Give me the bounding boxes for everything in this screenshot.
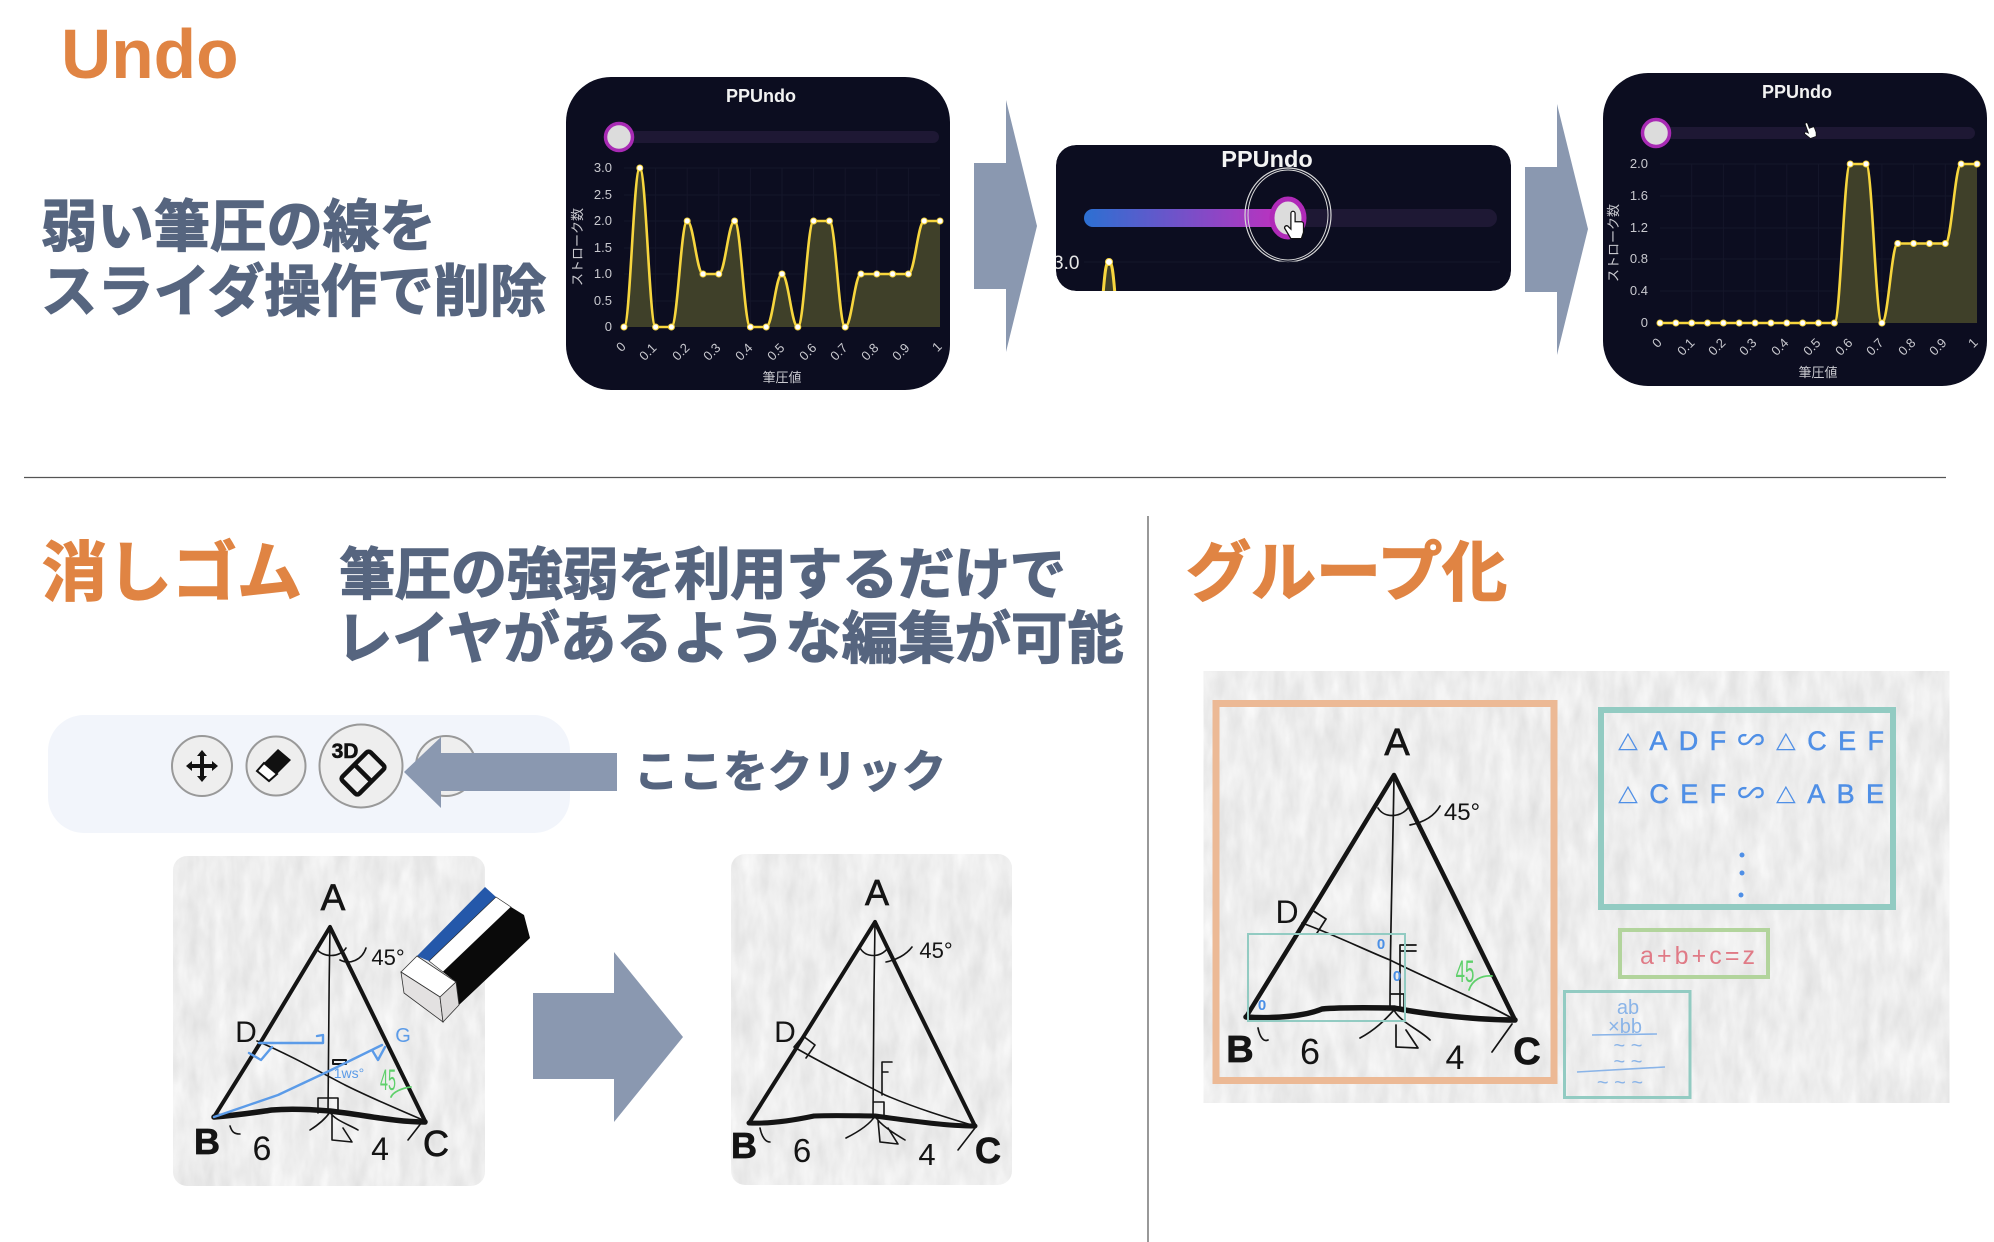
x axis labels: 0 bbox=[613, 339, 629, 355]
arrow: before to after bbox=[533, 952, 683, 1122]
group box: equation bbox=[1620, 930, 1768, 977]
y axis labels: 0.5 bbox=[594, 293, 612, 308]
icon: move button bbox=[172, 736, 232, 796]
icon: 3D eraser button bbox=[320, 724, 402, 808]
axis titles: 筆圧値 bbox=[1798, 365, 1838, 380]
triangle drawing: D bbox=[235, 1016, 257, 1049]
group box: similarity notes: △ CEF∽ △ ABE bbox=[1618, 779, 1884, 809]
triangle drawing: 6 bbox=[253, 1130, 271, 1168]
triangle drawing bbox=[731, 872, 1001, 1172]
group box: similarity notes: △ ADF∽ △ CEF bbox=[1618, 726, 1884, 756]
axis titles: ストローク数 bbox=[570, 208, 585, 286]
y axis labels: 1.2 bbox=[1630, 220, 1648, 235]
axis titles: 筆圧値 bbox=[762, 370, 802, 385]
y axis labels: 2.0 bbox=[1630, 156, 1648, 171]
x axis labels: 1 bbox=[929, 339, 945, 355]
icon: eraser button bbox=[246, 736, 306, 796]
y axis labels: 2.0 bbox=[594, 213, 612, 228]
panel: chart before undo bbox=[566, 77, 950, 390]
group box: multiplication: ×bb bbox=[1608, 1016, 1642, 1038]
x axis labels: 0.2 bbox=[1705, 335, 1729, 359]
arrow: second step bbox=[1525, 104, 1588, 355]
slider: at zero bbox=[606, 124, 939, 150]
text block: undo description: 弱い筆圧の線を bbox=[41, 195, 436, 258]
triangle drawing: 0 bbox=[1393, 968, 1401, 985]
triangle drawing: A bbox=[1384, 722, 1410, 764]
panel: chart before undo: PPUndo bbox=[726, 86, 796, 106]
panel: grouped sketch bbox=[1204, 671, 1950, 1103]
x axis labels: 0.7 bbox=[827, 340, 851, 364]
axis titles bbox=[1606, 204, 1838, 380]
slider: returned to zero bbox=[1642, 120, 1975, 146]
x axis labels: 0.9 bbox=[889, 340, 913, 364]
y axis labels: 0 bbox=[605, 319, 612, 334]
triangle drawing bbox=[194, 877, 449, 1168]
x axis labels: 0.8 bbox=[858, 340, 882, 364]
x axis labels: 0.2 bbox=[669, 340, 693, 364]
heading: grouping: グループ化 bbox=[1186, 536, 1507, 609]
x axis labels: 0.4 bbox=[732, 340, 756, 364]
panel: slider being dragged bbox=[1053, 145, 1511, 295]
x axis labels: 1 bbox=[1965, 335, 1981, 351]
axis titles bbox=[570, 208, 802, 385]
x axis labels: 0.5 bbox=[1800, 335, 1824, 359]
triangle drawing: 45° bbox=[919, 938, 953, 963]
callout: click here: ここをクリック bbox=[634, 748, 946, 797]
x axis labels bbox=[1649, 335, 1981, 359]
y axis labels: 1.5 bbox=[594, 240, 612, 255]
text block: eraser description bbox=[336, 543, 1124, 670]
x axis labels: 0.9 bbox=[1926, 335, 1950, 359]
icon: eraser bbox=[401, 887, 530, 1022]
triangle drawing: 45° bbox=[1444, 799, 1480, 826]
x axis labels: 0.8 bbox=[1895, 335, 1919, 359]
arrow: pointing at the button bbox=[404, 737, 617, 808]
text block: undo description: スライダ操作で削除 bbox=[41, 260, 546, 323]
icon: fourth button bbox=[416, 736, 476, 796]
triangle drawing: 4 bbox=[918, 1137, 936, 1172]
area chart: stroke counts with all pressures bbox=[621, 165, 943, 330]
group box: similarity notes bbox=[1601, 710, 1893, 907]
group box: multiplication: ~ ~ bbox=[1614, 1051, 1642, 1073]
triangle drawing: 6 bbox=[793, 1132, 811, 1169]
icon: 3D eraser button: 3D bbox=[332, 740, 358, 763]
x axis labels: 0.3 bbox=[700, 340, 724, 364]
slider thumb with halo bbox=[1245, 168, 1331, 262]
group box: equation: a+b+c=z bbox=[1640, 942, 1755, 970]
triangle drawing: B bbox=[731, 1125, 757, 1166]
triangle drawing: C bbox=[975, 1130, 1001, 1171]
panel: toolbar bbox=[48, 715, 570, 833]
x axis labels: 0.5 bbox=[764, 340, 788, 364]
panel: chart after undo: PPUndo bbox=[1762, 82, 1832, 102]
y axis labels bbox=[594, 160, 612, 334]
x axis labels: 0.7 bbox=[1863, 335, 1887, 359]
triangle drawing: C bbox=[423, 1123, 449, 1164]
chart fragment spike bbox=[1103, 262, 1115, 295]
y axis labels: 1.6 bbox=[1630, 188, 1648, 203]
triangle drawing: A bbox=[865, 872, 889, 913]
x axis labels: 0.1 bbox=[636, 340, 660, 364]
title: Undo: Undo bbox=[61, 15, 239, 93]
triangle drawing: 1ws° bbox=[334, 1065, 364, 1081]
group box: multiplication: ~ ~ bbox=[1614, 1035, 1642, 1057]
triangle drawing: A bbox=[321, 877, 346, 918]
triangle drawing: D bbox=[1275, 894, 1299, 930]
blue construction lines bbox=[214, 1035, 385, 1117]
y axis labels: 0.8 bbox=[1630, 251, 1648, 266]
y axis labels: 0 bbox=[1641, 315, 1648, 330]
area chart: weak strokes removed bbox=[1657, 161, 1980, 326]
triangle drawing: 4 bbox=[1446, 1039, 1464, 1077]
y axis labels: 2.5 bbox=[594, 187, 612, 202]
triangle drawing: 45° bbox=[371, 945, 405, 970]
triangle drawing: B bbox=[194, 1121, 220, 1162]
triangle drawing: D bbox=[774, 1016, 796, 1049]
y axis labels: 1.0 bbox=[594, 266, 612, 281]
group box: multiplication: ab bbox=[1617, 997, 1639, 1019]
text block: eraser description: レイヤがあるような編集が可能 bbox=[336, 607, 1124, 670]
triangle drawing: 0 bbox=[1377, 936, 1385, 953]
panel: slider being dragged: 3.0 bbox=[1053, 253, 1079, 274]
triangle drawing: G bbox=[395, 1025, 411, 1047]
x axis labels bbox=[613, 339, 945, 364]
x axis labels: 0.6 bbox=[796, 340, 820, 364]
triangle drawing: B bbox=[1226, 1029, 1254, 1071]
text block: undo description bbox=[41, 195, 546, 323]
panel: slider being dragged: PPUndo bbox=[1221, 146, 1313, 172]
x axis labels: 0.1 bbox=[1674, 335, 1698, 359]
triangle drawing: C bbox=[1513, 1031, 1541, 1073]
x axis labels: 0.4 bbox=[1768, 335, 1792, 359]
green angle mark bbox=[391, 1087, 411, 1097]
x axis labels: 0 bbox=[1649, 335, 1665, 351]
triangle drawing: 45 bbox=[1456, 955, 1474, 989]
triangle drawing: 0 bbox=[1258, 997, 1266, 1014]
y axis labels bbox=[1630, 156, 1648, 330]
axis titles: ストローク数 bbox=[1606, 204, 1621, 282]
triangle drawing: 45 bbox=[380, 1063, 396, 1096]
icon: hand cursor bbox=[1285, 211, 1304, 239]
y axis labels: 0.4 bbox=[1630, 283, 1648, 298]
panel: chart after undo bbox=[1603, 73, 1987, 386]
triangle drawing bbox=[1226, 722, 1541, 1077]
x axis labels: 0.3 bbox=[1736, 335, 1760, 359]
group box: multiplication bbox=[1564, 992, 1690, 1098]
x axis labels: 0.6 bbox=[1832, 335, 1856, 359]
text block: eraser description: 筆圧の強弱を利用するだけで bbox=[339, 543, 1066, 606]
y axis labels: 3.0 bbox=[594, 160, 612, 175]
triangle drawing: 6 bbox=[1300, 1031, 1320, 1072]
panel: sketch before erasing bbox=[173, 856, 530, 1186]
group box: triangle bbox=[1216, 704, 1554, 1080]
arrow: first step bbox=[974, 100, 1037, 352]
group box: multiplication: ~ ~ ~ bbox=[1597, 1072, 1643, 1094]
triangle drawing: 4 bbox=[371, 1131, 389, 1167]
icon: hand cursor bbox=[1801, 121, 1817, 140]
group box: sub-area of triangle bbox=[1248, 934, 1405, 1021]
heading: eraser: 消しゴム bbox=[42, 536, 302, 609]
panel: sketch after erasing bbox=[731, 854, 1012, 1185]
